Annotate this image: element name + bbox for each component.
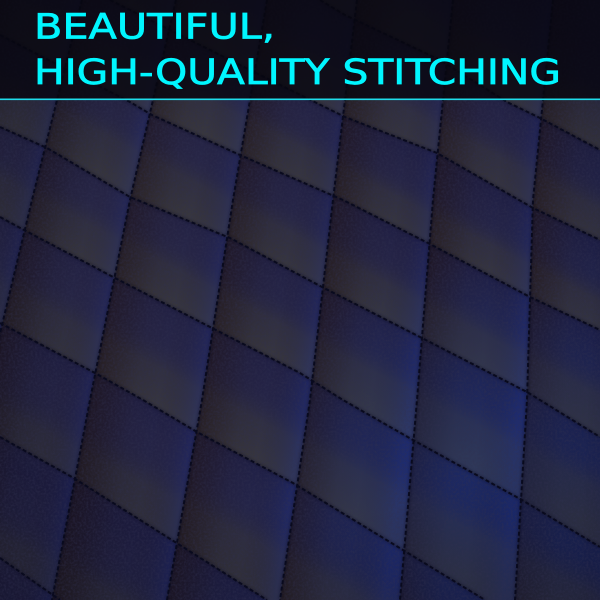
panel: dark title banner <box>0 0 600 99</box>
cyan divider line <box>0 98 600 100</box>
title: BEAUTIFUL, <box>34 8 275 48</box>
title: HIGH-QUALITY STITCHING <box>34 53 561 93</box>
title <box>34 8 561 93</box>
